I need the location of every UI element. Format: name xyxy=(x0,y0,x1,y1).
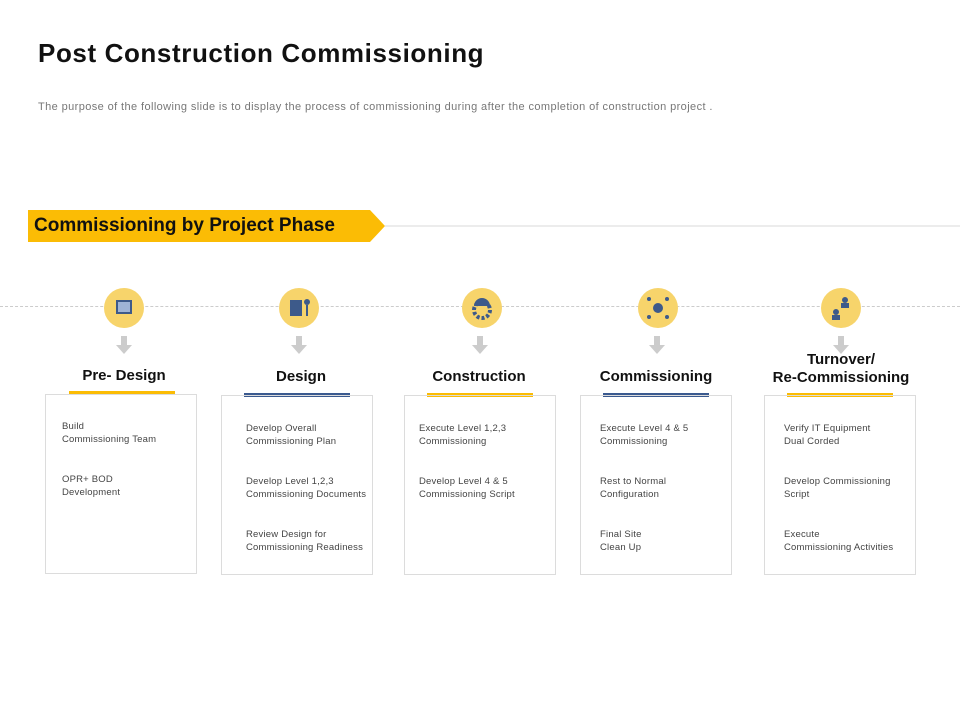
arrow xyxy=(649,336,665,354)
box: construction: Develop Level 4 & 5 xyxy=(419,476,508,487)
heading: Construction xyxy=(432,368,526,385)
box: pre-design: Development xyxy=(62,486,120,498)
box: design: Commissioning Readiness xyxy=(246,542,363,552)
column: Commissioning xyxy=(600,288,712,385)
heading: Design xyxy=(276,368,326,385)
box: design xyxy=(221,395,373,575)
icon: blueprint xyxy=(104,288,144,328)
box: turnover: Execute xyxy=(784,529,820,540)
arrow xyxy=(116,336,132,354)
box: turnover: Script xyxy=(784,488,809,500)
box: construction: Execute Level 1,2,3 xyxy=(419,423,506,434)
section banner: Commissioning by Project Phase xyxy=(34,215,335,236)
box: commissioning xyxy=(580,395,732,575)
section banner xyxy=(28,210,960,242)
heading: Re-Commissioning xyxy=(773,369,909,386)
column: Turnover xyxy=(773,288,909,386)
box: commissioning: Clean Up xyxy=(600,542,641,552)
box: construction: Commissioning Script xyxy=(419,488,515,500)
box: construction xyxy=(404,395,556,575)
column: Design xyxy=(276,288,326,385)
box: turnover: Dual Corded xyxy=(784,436,840,446)
box: turnover: Commissioning Activities xyxy=(784,542,893,552)
underline xyxy=(244,393,350,397)
underline xyxy=(787,393,893,397)
box: pre-design: Commissioning Team xyxy=(62,434,156,444)
box: construction: Commissioning xyxy=(419,436,487,446)
box: pre-design: OPR+ BOD xyxy=(62,474,113,485)
box: turnover: Verify IT Equipment xyxy=(784,423,871,434)
box: commissioning: Configuration xyxy=(600,488,659,500)
box: design: Commissioning Documents xyxy=(246,488,366,500)
dashed timeline xyxy=(0,306,960,307)
box: turnover xyxy=(764,395,916,575)
icon: helmet gear xyxy=(462,288,502,328)
box: commissioning: Execute Level 4 & 5 xyxy=(600,423,688,434)
box: commissioning: Rest to Normal xyxy=(600,476,666,487)
underline xyxy=(69,391,175,395)
title: Post Construction Commissioning xyxy=(38,38,484,68)
box: design: Develop Level 1,2,3 xyxy=(246,476,334,487)
column: Construction xyxy=(432,288,526,385)
heading: Commissioning xyxy=(600,368,712,385)
heading xyxy=(773,351,909,386)
box: commissioning: Final Site xyxy=(600,529,642,540)
box: pre-design: Build xyxy=(62,421,84,432)
heading: Pre- Design xyxy=(82,367,166,384)
underline xyxy=(427,393,533,397)
box: design: Review Design for xyxy=(246,529,326,540)
icon: plans xyxy=(279,288,319,328)
arrow xyxy=(833,336,849,354)
underline xyxy=(603,393,709,397)
arrow xyxy=(291,336,307,354)
box: design: Commissioning Plan xyxy=(246,436,336,446)
box: pre-design xyxy=(45,394,197,574)
arrow xyxy=(472,336,488,354)
box: design: Develop Overall xyxy=(246,423,317,434)
icon: network xyxy=(638,288,678,328)
box: turnover: Develop Commissioning xyxy=(784,476,891,487)
heading: Turnover/ xyxy=(807,351,875,368)
column: Pre-Design xyxy=(82,288,166,384)
icon: people cycle xyxy=(821,288,861,328)
box: commissioning: Commissioning xyxy=(600,436,668,446)
subtitle: The purpose of the following slide is to display the process of commissioning during after the completion of construction project . xyxy=(38,101,713,113)
